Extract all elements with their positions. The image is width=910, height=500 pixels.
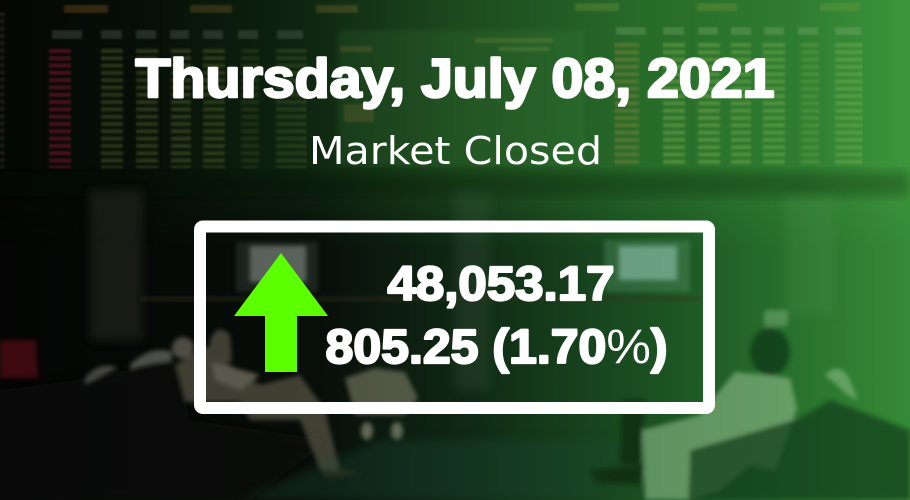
subtitle: Market Closed xyxy=(309,129,602,173)
index value: 48,053.17 xyxy=(388,258,614,311)
wall screens xyxy=(236,240,690,292)
red seated figure xyxy=(0,340,38,378)
dark seats left xyxy=(0,360,330,500)
center display panel xyxy=(338,30,585,166)
icon: green up arrow xyxy=(234,253,328,372)
center panel text xyxy=(340,38,553,122)
seated men left xyxy=(85,330,418,478)
dark band under boards xyxy=(0,172,910,196)
pillars xyxy=(90,190,835,390)
top ticker strip xyxy=(64,3,860,13)
right board column headers xyxy=(616,27,861,35)
right stock board xyxy=(626,43,851,165)
left stock board xyxy=(2,12,292,168)
floor xyxy=(240,440,625,500)
panel frame xyxy=(200,226,709,408)
index change: 805.25 (1.70%) xyxy=(326,321,668,374)
index panel xyxy=(200,226,709,408)
seated men right xyxy=(590,310,910,500)
title: Thursday, July 08, 2021 xyxy=(136,47,774,109)
left board column headers xyxy=(52,30,303,39)
wall ledge xyxy=(140,296,700,302)
